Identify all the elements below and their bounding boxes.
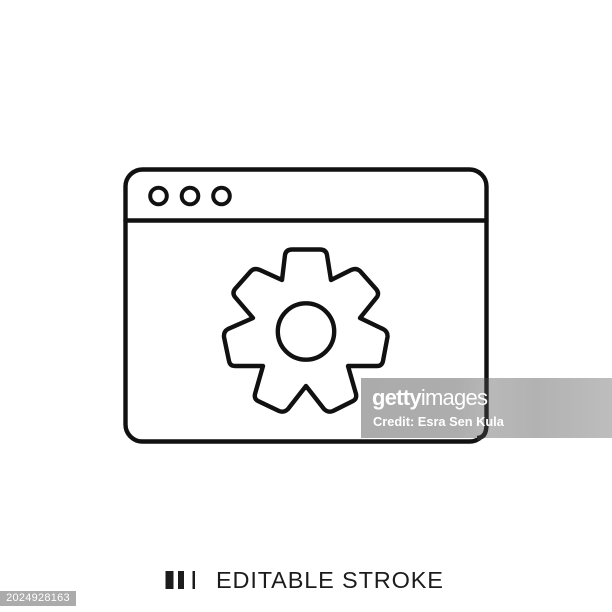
- image id tag: 2024928163: [6, 592, 70, 604]
- icon: gear outline: [224, 250, 388, 412]
- icon: stroke weight bars: [166, 571, 195, 589]
- caption: EDITABLE STROKE: [216, 567, 444, 593]
- watermark banner: [361, 378, 612, 438]
- watermark credit: Credit: Esra Sen Kula: [373, 414, 504, 429]
- window title bar divider: [126, 218, 486, 223]
- icon: gear center circle: [278, 303, 334, 360]
- window frame: [126, 170, 486, 442]
- watermark logo: gettyimages: [372, 385, 487, 410]
- image id tag: [0, 591, 76, 606]
- window control dots: [150, 188, 230, 204]
